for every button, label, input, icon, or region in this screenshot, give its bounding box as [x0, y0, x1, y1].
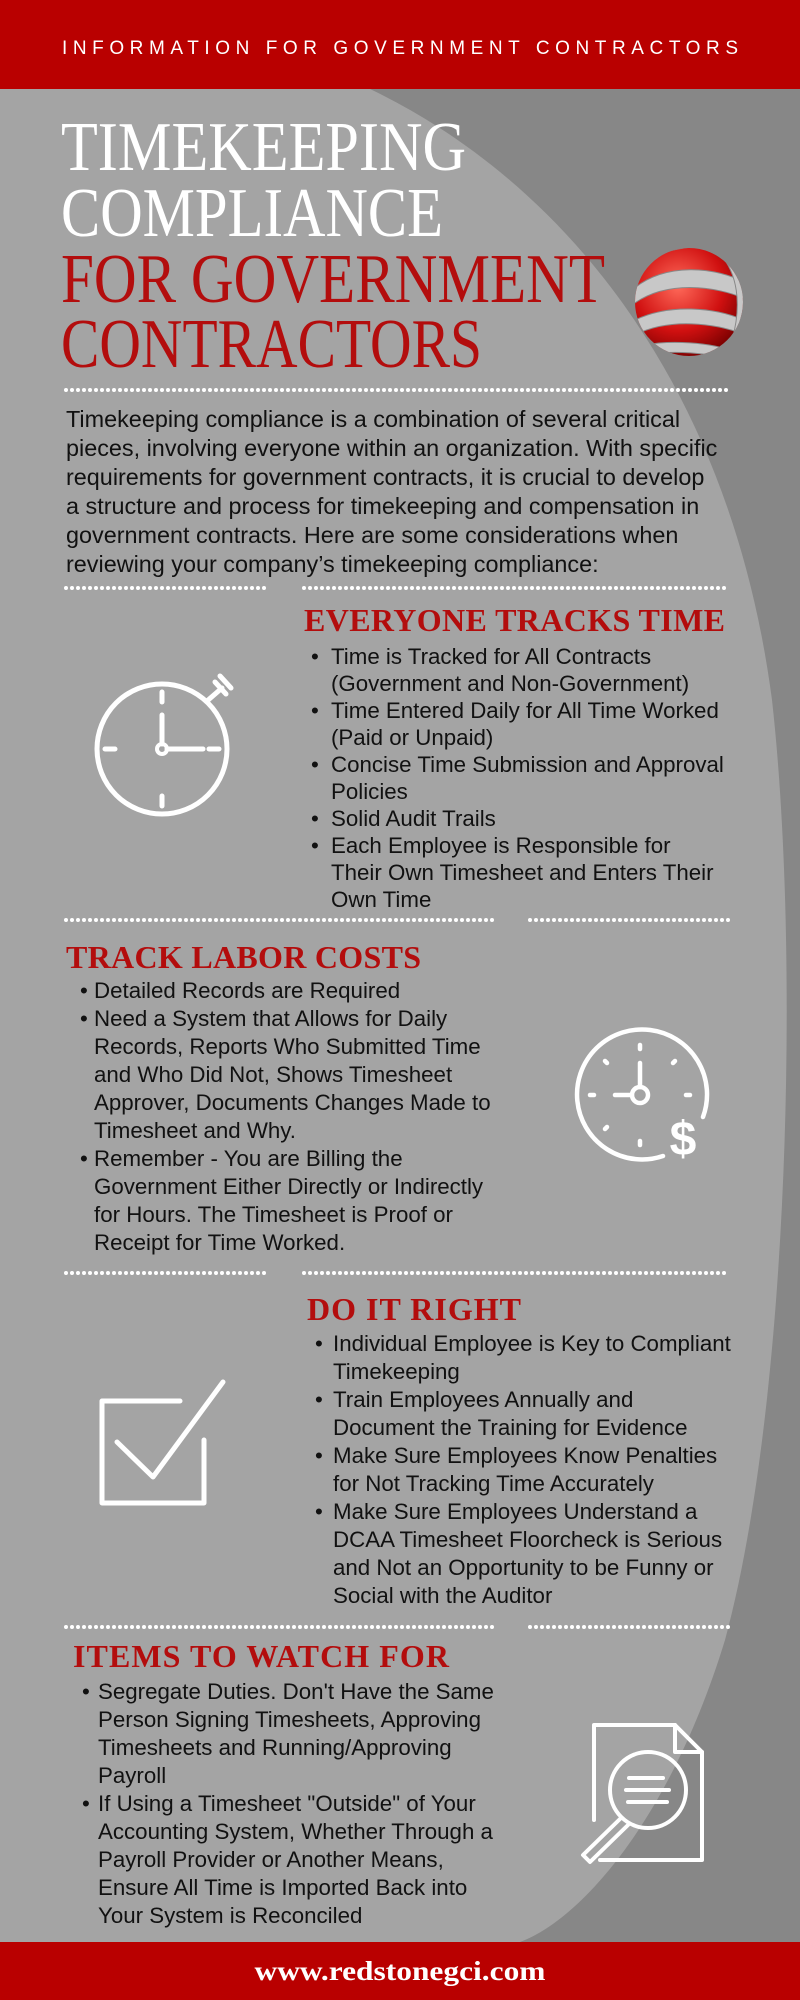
title: COMPLIANCE — [61, 175, 443, 252]
heading: track labor costs: TRACK LABOR COSTS — [66, 939, 421, 975]
bullet list 3: Document the Training for Evidence — [333, 1415, 687, 1440]
footer: www.redstonegci.com — [254, 1956, 546, 1986]
icon: stopwatch — [97, 676, 231, 814]
bullet list 4: Segregate Duties. Don't Have the Same — [98, 1679, 494, 1704]
panel: everyone tracks time — [97, 602, 725, 912]
bullet list 4: Payroll Provider or Another Means, — [98, 1847, 444, 1872]
bullet list 2 — [80, 978, 491, 1255]
bullet list 4 — [82, 1679, 494, 1928]
bullet list 1: (Paid or Unpaid) — [331, 725, 493, 750]
title: CONTRACTORS — [61, 306, 482, 383]
heading: items to watch for: ITEMS TO WATCH FOR — [73, 1638, 450, 1674]
bullet list 3: Timekeeping — [333, 1359, 460, 1384]
title: TIMEKEEPING — [61, 109, 466, 186]
bullet list 3: DCAA Timesheet Floorcheck is Serious — [333, 1527, 722, 1552]
bullet list 2: Approver, Documents Changes Made to — [94, 1090, 491, 1115]
bullet list 1: • — [311, 698, 319, 723]
intro paragraph: requirements for government contracts, it is crucial to develop — [66, 464, 704, 490]
bullet list 3: • — [315, 1443, 323, 1468]
bullet list 2: Timesheet and Why. — [94, 1118, 296, 1143]
heading: do it right: DO IT RIGHT — [307, 1291, 521, 1327]
header bar: INFORMATION FOR GOVERNMENT CONTRACTORS — [62, 38, 738, 59]
title: FOR GOVERNMENT — [61, 241, 605, 318]
icon: checkbox — [102, 1382, 223, 1503]
bullet list 2: • — [80, 1146, 88, 1171]
title — [61, 109, 605, 383]
bullet list 4: If Using a Timesheet "Outside" of Your — [98, 1791, 476, 1816]
bullet list 4: Timesheets and Running/Approving — [98, 1735, 452, 1760]
bullet list 4: Your System is Reconciled — [98, 1903, 362, 1928]
bullet list 2: Government Either Directly or Indirectly — [94, 1174, 484, 1199]
intro paragraph: Timekeeping compliance is a combination of several critical — [66, 406, 680, 432]
footer — [0, 1942, 800, 2000]
bullet list 2: for Hours. The Timesheet is Proof or — [94, 1202, 454, 1227]
bullet list 1: • — [311, 644, 319, 669]
bullet list 3: and Not an Opportunity to be Funny or — [333, 1555, 714, 1580]
icon: document with magnifier — [583, 1725, 702, 1862]
icon: logo sphere — [635, 248, 743, 356]
bullet list 1: Each Employee is Responsible for — [331, 833, 671, 858]
bullet list 1 — [311, 644, 724, 912]
icon: clock with dollar — [577, 1029, 707, 1166]
bullet list 3: Make Sure Employees Know Penalties — [333, 1443, 717, 1468]
bullet list 3: Train Employees Annually and — [333, 1387, 633, 1412]
bullet list 3: • — [315, 1331, 323, 1356]
bullet list 3 — [315, 1331, 732, 1608]
bullet list 1: • — [311, 752, 319, 777]
heading: everyone tracks time: EVERYONE TRACKS TIME — [304, 602, 725, 638]
panel: track labor costs — [66, 939, 707, 1255]
bullet list 3: • — [315, 1499, 323, 1524]
intro paragraph: a structure and process for timekeeping and compensation in — [66, 493, 699, 519]
bullet list 2: Detailed Records are Required — [94, 978, 400, 1003]
bullet list 1: • — [311, 833, 319, 858]
bullet list 3: Individual Employee is Key to Compliant — [333, 1331, 732, 1356]
header bar — [0, 0, 800, 89]
bullet list 1: Concise Time Submission and Approval — [331, 752, 724, 777]
bullet list 4: Payroll — [98, 1763, 166, 1788]
bullet list 2: • — [80, 1006, 88, 1031]
panel: do it right — [102, 1291, 732, 1608]
bullet list 1: Solid Audit Trails — [331, 806, 496, 831]
intro paragraph: pieces, involving everyone within an organization. With specific — [66, 435, 718, 461]
bullet list 2: Receipt for Time Worked. — [94, 1230, 345, 1255]
bullet list 3: for Not Tracking Time Accurately — [333, 1471, 655, 1496]
intro paragraph — [66, 406, 718, 577]
bullet list 1: Policies — [331, 779, 408, 804]
intro paragraph: government contracts. Here are some considerations when — [66, 522, 678, 548]
bullet list 4: • — [82, 1791, 90, 1816]
panel: items to watch for — [73, 1638, 702, 1928]
intro paragraph: reviewing your company’s timekeeping compliance: — [66, 551, 599, 577]
bullet list 2: Records, Reports Who Submitted Time — [94, 1034, 481, 1059]
bullet list 3: Social with the Auditor — [333, 1583, 553, 1608]
bullet list 1: • — [311, 806, 319, 831]
icon: clock with dollar: $ — [670, 1113, 697, 1166]
bullet list 4: Person Signing Timesheets, Approving — [98, 1707, 481, 1732]
bullet list 3: • — [315, 1387, 323, 1412]
bullet list 2: and Who Did Not, Shows Timesheet — [94, 1062, 453, 1087]
bullet list 2: • — [80, 978, 88, 1003]
bullet list 1: Own Time — [331, 887, 431, 912]
bullet list 1: Time Entered Daily for All Time Worked — [331, 698, 719, 723]
bullet list 1: Time is Tracked for All Contracts — [331, 644, 651, 669]
bullet list 2: Need a System that Allows for Daily — [94, 1006, 448, 1031]
bullet list 1: (Government and Non-Government) — [331, 671, 689, 696]
bullet list 4: • — [82, 1679, 90, 1704]
bullet list 3: Make Sure Employees Understand a — [333, 1499, 698, 1524]
bullet list 1: Their Own Timesheet and Enters Their — [331, 860, 714, 885]
bullet list 4: Accounting System, Whether Through a — [98, 1819, 494, 1844]
bullet list 4: Ensure All Time is Imported Back into — [98, 1875, 467, 1900]
bullet list 2: Remember - You are Billing the — [94, 1146, 403, 1171]
